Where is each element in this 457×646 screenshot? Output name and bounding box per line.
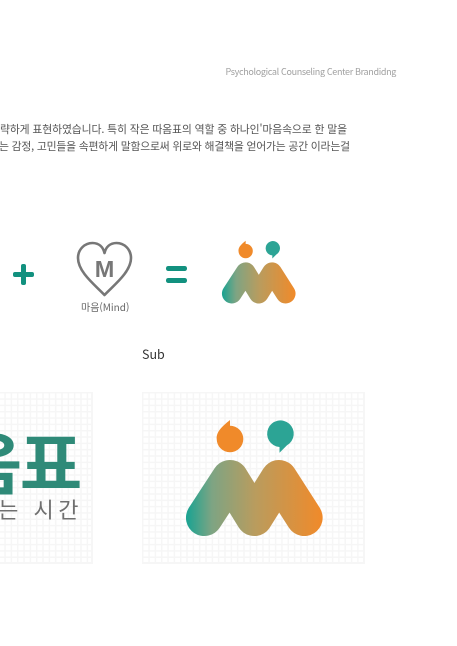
description line 2: 는 감정, 고민들을 속편하게 말함으로써 위로와 해결책을 얻어가는 공간 이라는걸 [0, 138, 350, 154]
icon: plus sign [13, 264, 34, 285]
icon: heart with M: M [95, 256, 114, 282]
icon: teal speech bubble [267, 420, 294, 453]
icon: orange speech drop [217, 420, 243, 452]
heart caption: 마음(Mind) [81, 299, 129, 314]
icon: equals sign [166, 266, 187, 283]
description line 1: 략하게 표현하였습니다. 특히 작은 따옴표의 역할 중 하나인'마음속으로 한 말을 [0, 121, 347, 137]
wordmark tagline: 는 시간 [0, 493, 83, 525]
heading: sub: Sub [142, 344, 165, 363]
icon: heart with M [76, 242, 132, 296]
panel: wordmark on grid [0, 392, 93, 564]
description text [0, 121, 350, 154]
header label: Psychological Counseling Center Brandidng [226, 65, 396, 78]
panel: symbol on grid [142, 392, 364, 564]
